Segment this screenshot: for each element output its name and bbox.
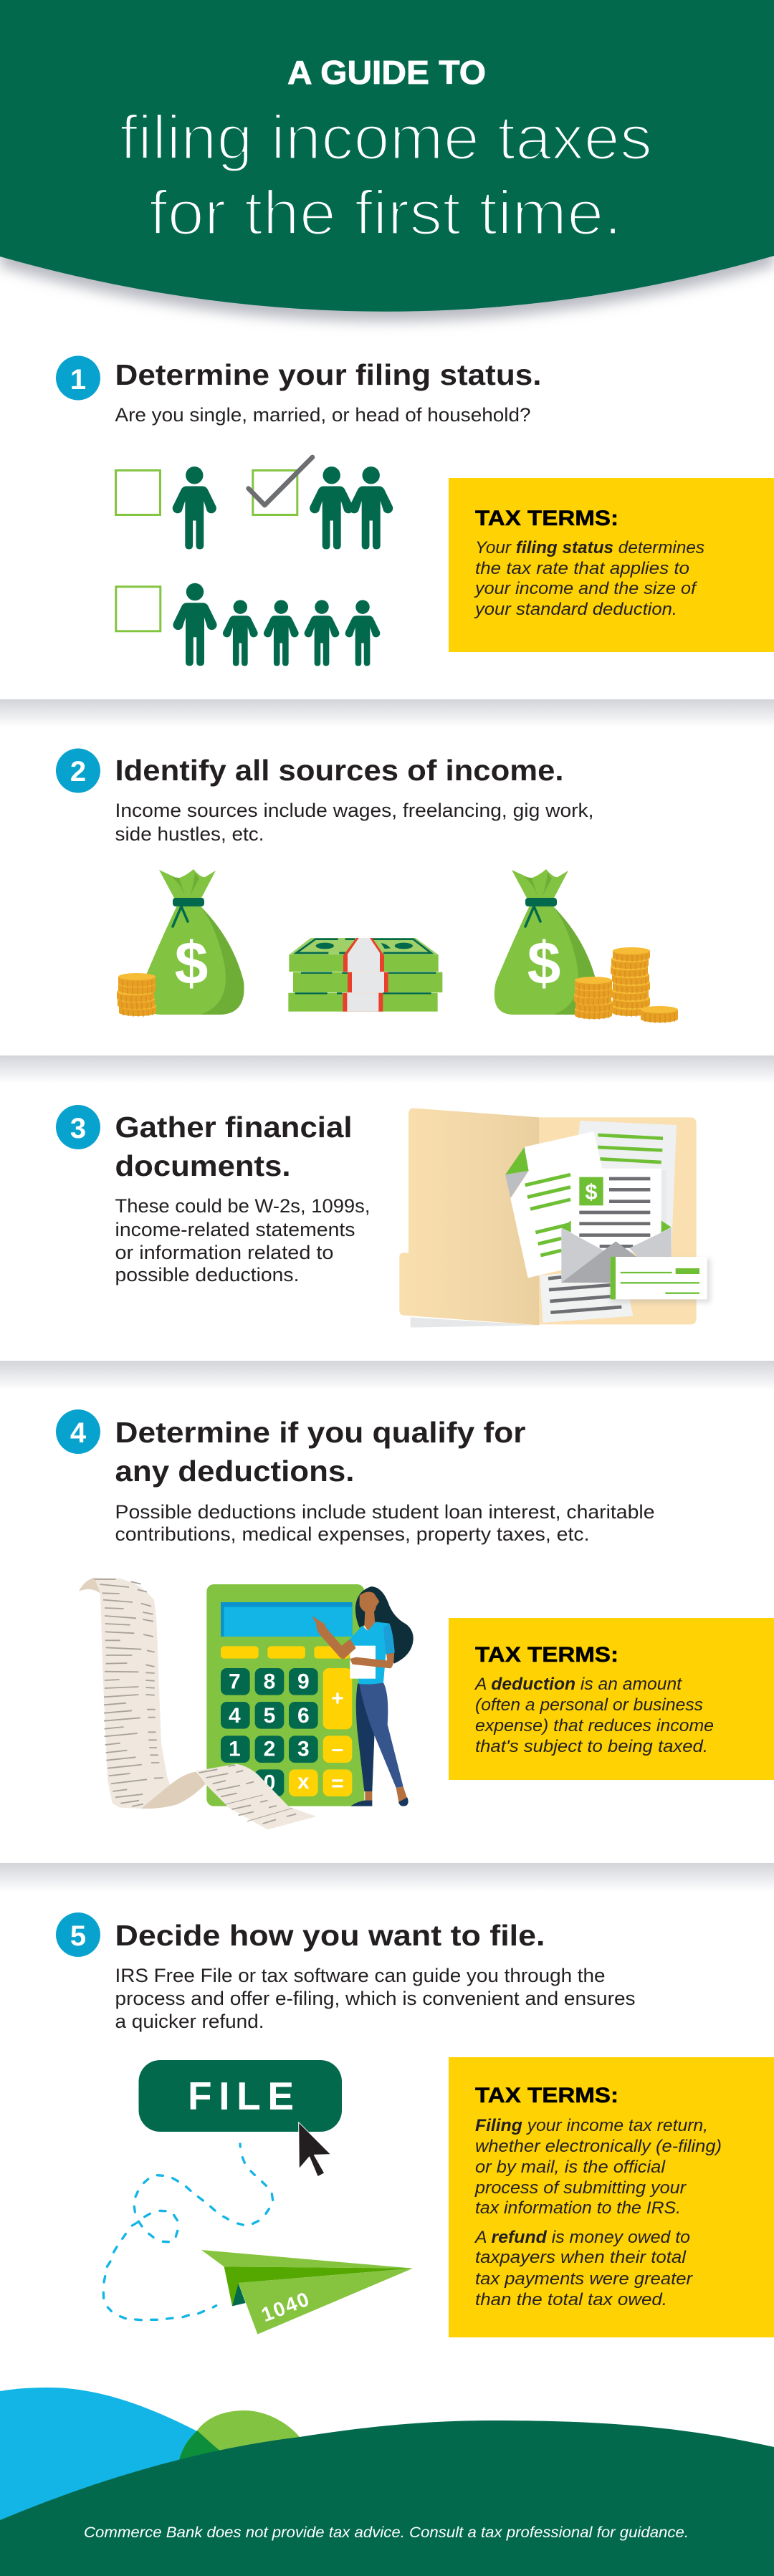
callout: filing and refund tax terms: whether electronically (e-filing) bbox=[475, 2137, 722, 2156]
panel: step 2 sources of income bbox=[56, 748, 678, 1023]
callout: deduction tax term: A deduction is an amount bbox=[474, 1675, 682, 1694]
icon: married filer checked bbox=[249, 457, 393, 549]
step number 5 bbox=[56, 1912, 100, 1957]
callout: filing and refund tax terms: or by mail, is the official bbox=[475, 2158, 666, 2177]
icon: envelope bbox=[561, 1220, 672, 1283]
heading: step 1: Determine your filing status. bbox=[115, 358, 542, 391]
callout: filing status tax term: the tax rate that applies to bbox=[475, 559, 689, 578]
title line 1: filing income taxes bbox=[120, 103, 652, 173]
callout: deduction tax term: that's subject to being taxed. bbox=[475, 1737, 708, 1756]
icon: head of household checkbox bbox=[116, 583, 380, 666]
icon: calculator: 3 bbox=[297, 1738, 310, 1761]
icon: calculator: 8 bbox=[264, 1670, 275, 1694]
document: statement with dollar icon: $ bbox=[585, 1179, 598, 1204]
text: step 3 description: These could be W-2s, 1099s, bbox=[115, 1195, 370, 1217]
callout: filing and refund tax terms: Filing your income tax return, bbox=[475, 2116, 708, 2135]
document: tilted white sheet bbox=[510, 1131, 621, 1278]
heading: step 2: Identify all sources of income. bbox=[115, 754, 563, 787]
text: step 5 description: a quicker refund. bbox=[115, 2011, 264, 2032]
icon: calculator: 0 bbox=[264, 1771, 275, 1794]
icon: money bag with coins left bbox=[117, 869, 244, 1017]
callout: filing and refund tax terms: TAX TERMS: bbox=[475, 2084, 618, 2107]
callout: deduction tax term: expense) that reduces income bbox=[475, 1716, 714, 1735]
step number 3 bbox=[56, 1105, 100, 1149]
callout: deduction tax term bbox=[449, 1618, 774, 1780]
text: step 3 description: income-related statements bbox=[115, 1219, 355, 1240]
step number 1 bbox=[56, 355, 100, 400]
panel: step 3 financial documents bbox=[56, 1105, 711, 1328]
button: file: FILE bbox=[188, 2074, 294, 2118]
kicker: a guide to: A GUIDE TO bbox=[287, 54, 486, 91]
step number 4 bbox=[56, 1409, 100, 1454]
panel: step 4 deductions bbox=[56, 1409, 774, 1829]
panel: step 1 filing status bbox=[56, 355, 774, 666]
icon: calculator: = bbox=[331, 1771, 344, 1795]
heading: step 4: Determine if you qualify for bbox=[115, 1416, 526, 1449]
callout: deduction tax term: TAX TERMS: bbox=[475, 1643, 618, 1667]
step number 5: 5 bbox=[70, 1920, 86, 1952]
icon: calculator: 2 bbox=[264, 1738, 275, 1761]
icon: folder with documents bbox=[399, 1109, 711, 1328]
text: step 1 description: Are you single, married, or head of household? bbox=[115, 404, 530, 426]
heading: step 5: Decide how you want to file. bbox=[115, 1919, 545, 1952]
callout: deduction tax term: (often a personal or business bbox=[475, 1695, 703, 1715]
icon: calculator: x bbox=[297, 1770, 310, 1794]
text: step 3 description: possible deductions. bbox=[115, 1264, 300, 1285]
icon: money bag with coins left: $ bbox=[175, 929, 208, 997]
text: step 5 description bbox=[115, 1965, 636, 2032]
document: bottom lines sheet bbox=[540, 1268, 633, 1323]
illustration: long paper receipt bbox=[79, 1578, 317, 1829]
icon: green check card bbox=[611, 1257, 711, 1303]
icon: calculator bbox=[206, 1584, 364, 1806]
text: step 2 description: side hustles, etc. bbox=[115, 823, 264, 845]
text: step 4 description: contributions, medical expenses, property taxes, etc. bbox=[115, 1523, 589, 1545]
callout: filing and refund tax terms: A refund is money owed to bbox=[474, 2228, 690, 2247]
header banner bbox=[0, 0, 774, 322]
icon: calculator: 1 bbox=[229, 1738, 241, 1761]
callout: filing and refund tax terms: tax payments were greater bbox=[475, 2269, 693, 2289]
text: step 2 description bbox=[115, 800, 593, 845]
footer disclaimer: Commerce Bank does not provide tax advice. Consult a tax professional for guidance. bbox=[84, 2524, 689, 2541]
panel: step 5 how to file bbox=[56, 1912, 774, 2337]
icon: calculator: – bbox=[332, 1738, 343, 1761]
button: file bbox=[139, 2060, 342, 2132]
illustration: cursor, flight path and paper plane bbox=[103, 2122, 413, 2335]
callout: filing status tax term: TAX TERMS: bbox=[475, 507, 618, 530]
callout: filing and refund tax terms: process of submitting your bbox=[474, 2178, 687, 2198]
heading: step 4: any deductions. bbox=[115, 1455, 354, 1488]
text: step 5 description: IRS Free File or tax software can guide you through the bbox=[115, 1965, 605, 1986]
title line 2: for the first time. bbox=[149, 178, 622, 248]
text: step 2 description: Income sources include wages, freelancing, gig work, bbox=[115, 800, 593, 821]
section divider shadows bbox=[0, 699, 774, 1892]
callout: filing and refund tax terms: tax information to the IRS. bbox=[475, 2198, 681, 2218]
step number 2: 2 bbox=[70, 756, 86, 787]
callout: filing status tax term: your income and the size of bbox=[474, 579, 697, 598]
heading: step 3 bbox=[115, 1111, 353, 1182]
heading: step 3: documents. bbox=[115, 1149, 291, 1182]
callout: filing status tax term: Your filing status determines bbox=[475, 538, 704, 557]
step number 3: 3 bbox=[70, 1113, 86, 1144]
callout: filing and refund tax terms: taxpayers when their total bbox=[475, 2248, 687, 2267]
callout: filing status tax term bbox=[449, 478, 774, 652]
icon: single filer checkbox bbox=[116, 466, 216, 549]
callout: filing and refund tax terms: than the total tax owed. bbox=[475, 2290, 667, 2309]
document: statement with dollar icon bbox=[571, 1169, 666, 1250]
step number 1: 1 bbox=[70, 364, 86, 396]
icon: stack of cash bbox=[288, 938, 442, 1012]
icon: paper airplane 1040: 1040 bbox=[258, 2288, 312, 2326]
text: step 5 description: process and offer e-filing, which is convenient and ensures bbox=[115, 1988, 636, 2009]
illustration: calculator, woman and receipt bbox=[79, 1578, 414, 1829]
step number 4: 4 bbox=[70, 1417, 87, 1449]
icon: calculator: 5 bbox=[264, 1704, 275, 1728]
icon: calculator: + bbox=[331, 1687, 344, 1710]
icon: calculator: 7 bbox=[229, 1670, 241, 1694]
document: back green lines sheet bbox=[566, 1121, 677, 1256]
text: step 3 description bbox=[115, 1195, 370, 1285]
icon: money bag with coins right bbox=[494, 869, 678, 1023]
callout: filing status tax term: your standard deduction. bbox=[474, 600, 677, 619]
footer hills bbox=[0, 2388, 774, 2576]
illustration: woman pointing at calculator bbox=[312, 1586, 414, 1806]
text: step 3 description: or information related to bbox=[115, 1242, 334, 1263]
text: step 4 description bbox=[115, 1501, 655, 1545]
icon: paper airplane 1040 bbox=[201, 2250, 413, 2335]
step number 2 bbox=[56, 748, 100, 793]
dashed flight path bbox=[103, 2144, 273, 2320]
callout: filing and refund tax terms bbox=[449, 2057, 774, 2337]
icon: calculator: 4 bbox=[229, 1704, 241, 1728]
heading: step 4 bbox=[115, 1416, 526, 1488]
icon: money bag with coins right: $ bbox=[527, 929, 560, 997]
heading: step 3: Gather financial bbox=[115, 1111, 353, 1144]
text: step 4 description: Possible deductions include student loan interest, charitable bbox=[115, 1501, 655, 1523]
icon: calculator: 9 bbox=[297, 1670, 310, 1694]
icon: calculator: 6 bbox=[297, 1704, 310, 1728]
icon: mouse cursor bbox=[299, 2122, 331, 2177]
